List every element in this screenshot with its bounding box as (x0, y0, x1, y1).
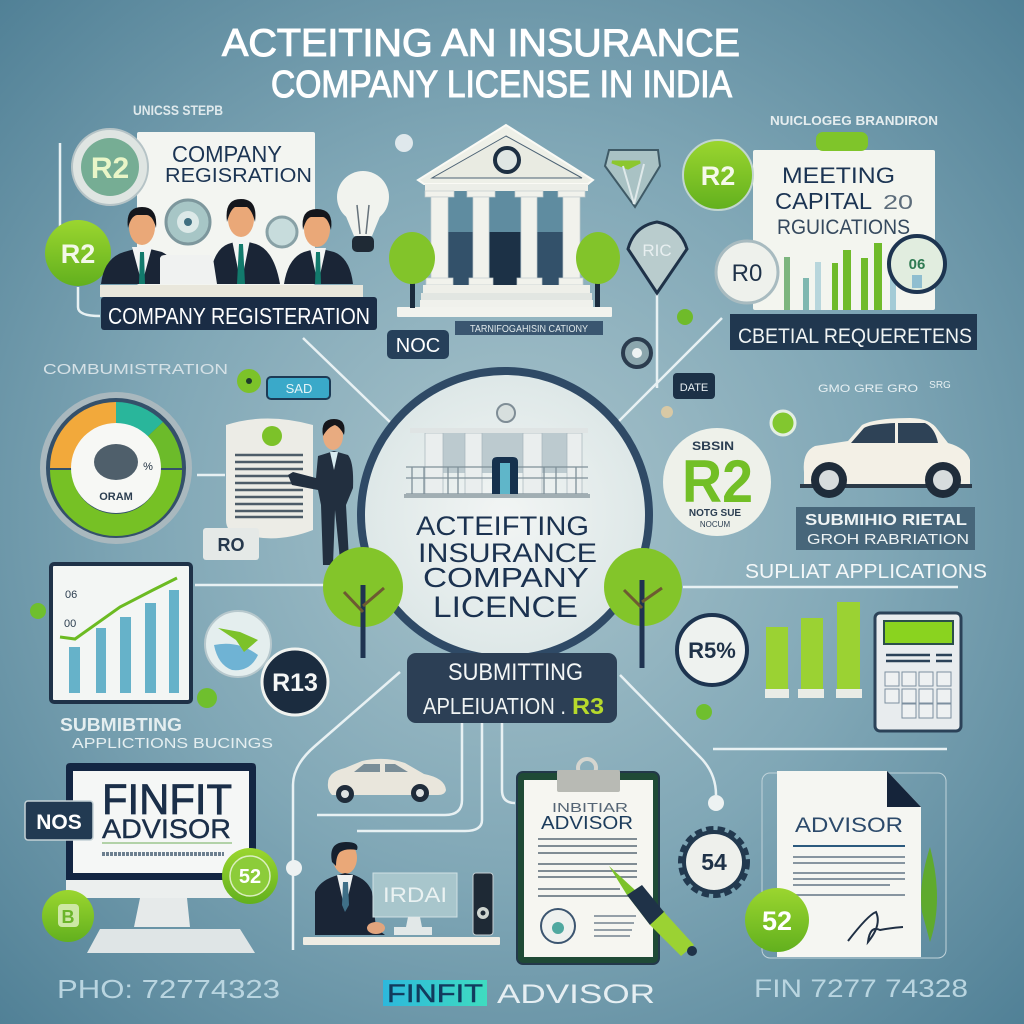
connector lines (60, 143, 958, 950)
panel: clipboard: INBITIAR (552, 800, 628, 815)
badge: R2 round: NOTG SUE (689, 508, 741, 519)
heading: meeting capital (775, 163, 913, 239)
icon: white car (800, 418, 972, 498)
label: submitted rental: SUBMIHIO RIETAL (805, 512, 967, 529)
badge: green B: B (62, 907, 74, 927)
label: submitted rental: GROH RABRIATION (807, 531, 969, 548)
footer (57, 974, 968, 1009)
badge: R5% (677, 615, 747, 685)
label: submitting application (407, 653, 617, 723)
icon: green R2 badge (683, 140, 753, 210)
chart: green bars (765, 602, 862, 698)
chart: growth line and bars: 00 (64, 618, 76, 630)
panel: central license circle (361, 371, 649, 659)
text: small label left: COMBUMISTRATION (43, 361, 228, 378)
text: submit applications: SUPLIAT APPLICATIONS (745, 561, 987, 583)
panel: company registration (45, 102, 377, 330)
panel: meeting capital requirements: NUICLOGEG BRANDIRON (770, 113, 938, 128)
panel: finfit advisor monitor: ADVISOR (102, 814, 231, 844)
panel: percent badge, bars and calculator (677, 602, 961, 731)
label: submitting application: APLEIUATION . (423, 693, 566, 719)
central text (416, 511, 597, 624)
chart: growth line and bars: 06 (65, 589, 77, 601)
icon: document and presenter (226, 418, 353, 565)
central text: LICENCE (433, 591, 578, 624)
icon: green R2 badge (45, 220, 111, 286)
icon: small green tags: SAD (286, 381, 312, 396)
panel: company registration: UNICSS STEPB (133, 102, 223, 118)
panel: finfit advisor monitor (25, 763, 278, 953)
footer: FIN 7277 74328 (754, 975, 968, 1003)
icon: trees beside building (389, 232, 620, 308)
connector node (286, 860, 302, 876)
business people (101, 199, 353, 284)
panel: meeting capital requirements (683, 113, 977, 350)
label: submitting application: SUBMITTING (448, 659, 583, 686)
connector node (708, 795, 724, 811)
badge: R5%: R5% (688, 638, 736, 663)
panel: clipboard (517, 759, 697, 964)
label: R0: RO (218, 535, 244, 555)
badge: 52: 52 (762, 906, 792, 936)
badge: 52 (745, 888, 809, 952)
label: building caption strip: TARNIFOGAHISIN CATIONY (470, 324, 588, 335)
badge: R0: R0 (732, 260, 762, 287)
central text: INSURANCE (418, 538, 597, 568)
icon: pen (609, 866, 697, 956)
bars (784, 243, 896, 310)
label: company registration: COMPANY REGISTERATION (108, 303, 370, 329)
icon: small green tags (237, 369, 330, 399)
heading: company registration: REGISRATION (165, 165, 312, 187)
heading: company registration: COMPANY (172, 141, 282, 167)
panel: finfit advisor monitor: FINFIT (102, 776, 232, 824)
icon: light bulb (337, 134, 413, 252)
footer: FINFIT (387, 980, 483, 1008)
icon: government building (397, 125, 612, 317)
label: NOC: NOC (396, 335, 440, 357)
icon: advisor at desk: IRDAI (383, 884, 447, 907)
badge: R2 round: R2 (682, 448, 753, 515)
badge: green 52: 52 (239, 866, 261, 888)
label: building caption strip (455, 321, 603, 335)
heading: meeting capital: RGUICATIONS (777, 216, 910, 239)
chart: donut gauge: % (143, 461, 153, 473)
panel: advisor document: ADVISOR (795, 814, 903, 837)
label: submitting application: R3 (572, 693, 604, 719)
icon: small seal (623, 339, 651, 367)
icon: left tree (323, 547, 403, 658)
title (222, 22, 740, 106)
icon: round globe (205, 611, 271, 677)
chart: donut gauge: ORAM (99, 491, 133, 503)
title: COMPANY LICENSE IN INDIA (271, 64, 733, 106)
icon: calculator (875, 613, 961, 731)
chart: growth line and bars (51, 564, 191, 702)
icon: green R2 badge: R2 (701, 161, 735, 191)
footer: ADVISOR (497, 979, 655, 1009)
badge: R2 round (663, 428, 771, 536)
small green dots (30, 603, 712, 720)
small icons right of circle (661, 309, 951, 435)
heading: meeting capital: CAPITAL (775, 188, 872, 214)
small icons right of circle: SRG (929, 380, 951, 391)
badge: R2 grey: R2 (91, 152, 129, 185)
icon: gem and pin: RIC (642, 241, 672, 260)
icon: magnifier (889, 236, 945, 292)
text: submitting applications: APPLICTIONS BUCINGS (72, 735, 273, 752)
label: company registration (100, 285, 377, 330)
icon: magnifier: 06 (909, 256, 925, 273)
icon: building in circle (404, 428, 590, 498)
title: ACTEITING AN INSURANCE (222, 22, 740, 65)
icon: advisor at desk (303, 842, 500, 945)
footer: PHO: 72774323 (57, 974, 280, 1004)
icon: right tree (604, 548, 682, 668)
small icons right of circle: DATE (680, 382, 708, 394)
label: credential requirements: CBETIAL REQUERETENS (738, 325, 972, 348)
icon: green R2 badge: R2 (61, 239, 95, 269)
icon: leaf (921, 847, 937, 942)
icon: seal in circle (497, 404, 515, 422)
badge: R2 grey (72, 129, 148, 205)
label: NOS: NOS (36, 811, 82, 834)
text: submitting applications (60, 715, 273, 752)
heading: meeting capital: 20 (883, 192, 913, 214)
badge: green 52 (222, 848, 278, 904)
badge: R13: R13 (272, 669, 318, 697)
badge: R2 round: NOCUM (700, 520, 730, 529)
label: R0 (203, 528, 259, 560)
label: NOS (25, 801, 93, 840)
small icons right of circle: GMO GRE GRO (818, 383, 919, 395)
icon: seals (166, 200, 297, 247)
central text: ACTEIFTING (416, 511, 589, 541)
badge: R0 (716, 241, 778, 303)
text: submitting applications: SUBMIBTING (60, 715, 182, 735)
heading: company registration (165, 141, 312, 187)
badge: R2 round: SBSIN (692, 439, 734, 453)
label: credential requirements (730, 314, 977, 350)
heading: meeting capital: MEETING (782, 163, 895, 188)
label: submitted rental (796, 507, 975, 550)
panel: clipboard: ADVISOR (541, 813, 633, 833)
icon: gear 54 (682, 830, 746, 894)
badge: R13 (262, 649, 328, 715)
badge: green B (42, 890, 94, 942)
chart: donut gauge (43, 395, 189, 541)
icon: gem and pin (605, 150, 687, 293)
panel: advisor document (745, 771, 946, 958)
small car (328, 759, 446, 803)
icon: gear 54: 54 (701, 849, 727, 875)
central text: COMPANY (423, 562, 589, 593)
label: NOC (387, 330, 449, 359)
